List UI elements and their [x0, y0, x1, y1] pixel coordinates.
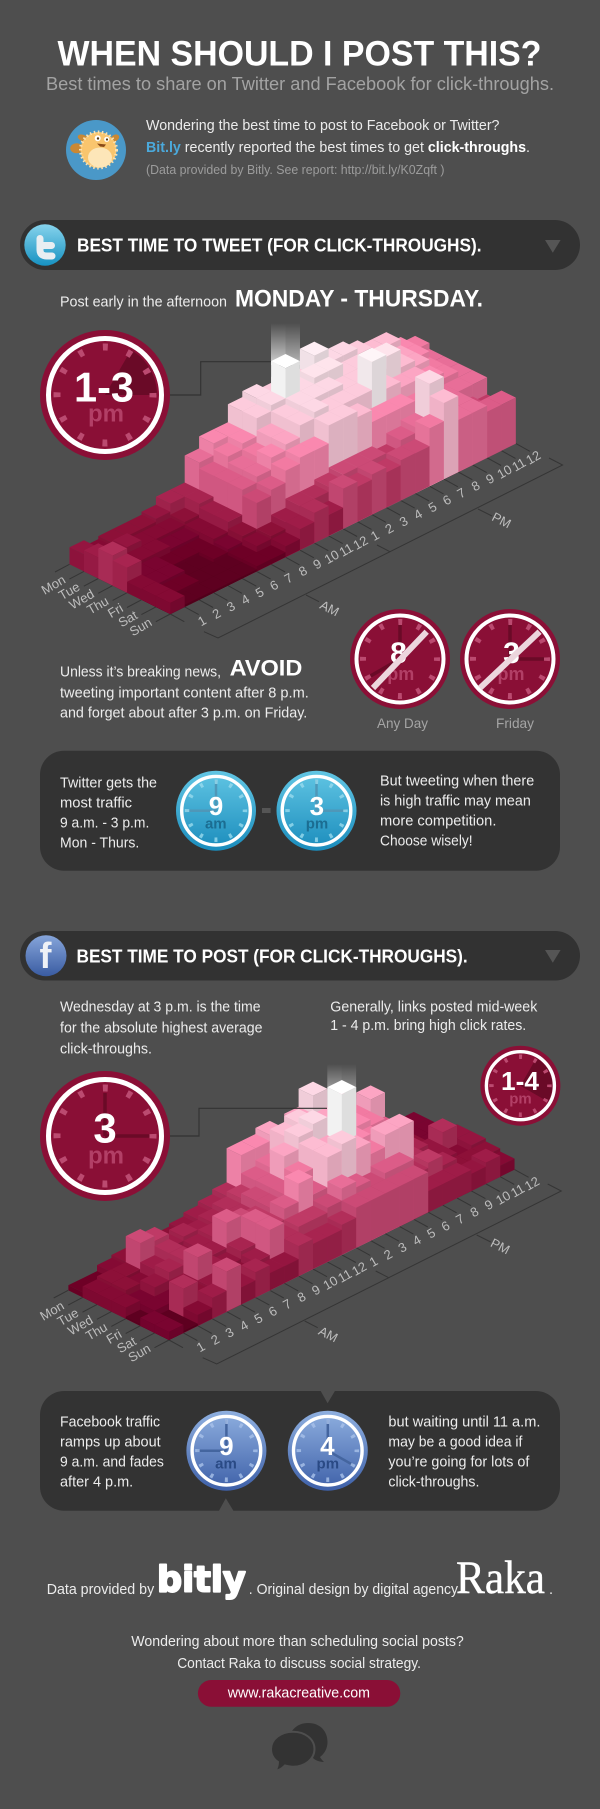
chart: facebook click-throughs 3D bars: PM: [488, 1235, 512, 1257]
avoid text: tweeting important content after 8 p.m.: [60, 685, 309, 701]
clock: 1-3 pm: 1-3: [74, 364, 134, 411]
clock: 4 pm facebook: pm: [317, 1455, 339, 1472]
intro text: Bit.ly recently reported the best times to get click-throughs.: [146, 140, 530, 156]
clock: avoid 8 pm any day: [350, 609, 450, 731]
clock: 1-4 pm small: pm: [509, 1090, 532, 1107]
chart: twitter click-throughs 3D bars: 10: [322, 547, 342, 567]
panel text left: Mon - Thurs.: [60, 835, 139, 851]
banner: best time to tweet: [20, 220, 580, 270]
connector: clock to peak: [170, 362, 271, 395]
clock: 3 pm: pm: [306, 815, 328, 832]
dash between clocks: [262, 808, 271, 813]
credits line: .: [549, 1582, 553, 1598]
chart: facebook click-throughs 3D bars: Fri: [104, 1326, 124, 1347]
intro text: Wondering the best time to post to Facebook or Twitter?: [146, 118, 500, 134]
intro text: [146, 118, 530, 177]
panel text left: ramps up about: [60, 1435, 161, 1451]
panel text left: most traffic: [60, 795, 132, 811]
panel text right: [380, 773, 534, 849]
panel text right: click-throughs.: [388, 1475, 479, 1491]
panel text left: Facebook traffic: [60, 1415, 160, 1431]
chart: twitter click-throughs 3D bars: 3: [224, 598, 238, 615]
chart: twitter click-throughs 3D bars: 6: [267, 577, 281, 594]
banner: best time to tweet: BEST TIME TO TWEET (FOR CLICK-THROUGHS).: [77, 235, 482, 256]
chart: facebook click-throughs 3D bars: 10: [493, 1188, 513, 1208]
banner: best time to post: BEST TIME TO POST (FOR CLICK-THROUGHS).: [76, 945, 468, 966]
chart: twitter click-throughs 3D bars: Fri: [105, 600, 126, 621]
chart: twitter click-throughs 3D bars: Sat: [116, 607, 140, 630]
chart: facebook click-throughs 3D bars: 8: [467, 1204, 481, 1220]
avoid text: and forget about after 3 p.m. on Friday.: [60, 705, 307, 721]
clock: avoid 8 pm any day: pm: [387, 664, 414, 684]
chart: facebook click-throughs 3D bars: 5: [424, 1225, 438, 1242]
clock: 1-3 pm: [40, 330, 170, 460]
chart: facebook click-throughs 3D bars: 12: [349, 1259, 369, 1279]
chart: twitter click-throughs 3D bars: 11: [336, 540, 356, 560]
title: WHEN SHOULD I POST THIS?: [58, 35, 542, 74]
panel text left: after 4 p.m.: [60, 1475, 133, 1491]
credits line: bitly: [157, 1560, 246, 1601]
credits line: Raka: [456, 1552, 545, 1604]
clock: 1-4 pm small: 1-4: [501, 1066, 540, 1096]
button: website: [198, 1680, 400, 1707]
chart: facebook click-throughs 3D bars: 9: [309, 1282, 323, 1298]
chart: twitter click-throughs 3D bars: 8: [469, 478, 483, 494]
panel text left: [60, 1415, 164, 1491]
chart: facebook click-throughs 3D bars: 11: [508, 1181, 527, 1200]
chart: facebook click-throughs 3D bars: 8: [295, 1289, 308, 1305]
chart: facebook click-throughs 3D bars: Thu: [83, 1319, 110, 1343]
chart: twitter click-throughs 3D bars: Sun: [127, 615, 154, 639]
contact text: [131, 1634, 464, 1672]
connector: clock to facebook peak: [170, 1108, 327, 1136]
text: wednesday at 3 pm: [60, 1000, 262, 1057]
clock: avoid 3 pm friday: 3: [503, 637, 520, 670]
chart: facebook click-throughs 3D bars: 12: [522, 1173, 542, 1194]
chart: twitter click-throughs 3D bars: AM: [317, 597, 342, 619]
text: generally mid-week: [330, 1000, 538, 1034]
clock: 4 pm facebook: [288, 1411, 368, 1491]
clock: 3 pm: [276, 771, 356, 851]
heading: monday to thursday: [60, 286, 483, 313]
contact text: Wondering about more than scheduling social posts?: [131, 1634, 464, 1650]
clock: 9 am: am: [205, 815, 227, 832]
panel text right: but waiting until 11 a.m.: [388, 1415, 540, 1431]
button: website: www.rakacreative.com: [227, 1686, 370, 1702]
chart: facebook click-throughs 3D bars: Mon: [37, 1298, 67, 1324]
chart: twitter click-throughs 3D bars: 2: [382, 520, 396, 537]
chart: facebook click-throughs 3D bars: 5: [251, 1310, 265, 1327]
chart: facebook click-throughs 3D bars: 3: [395, 1239, 409, 1256]
clock: avoid 8 pm any day: 8: [390, 637, 407, 670]
clock: 3 pm large: 3: [93, 1105, 117, 1152]
chart: twitter click-throughs 3D bars: 3: [397, 513, 411, 530]
chart: twitter click-throughs 3D bars: PM: [489, 509, 514, 531]
chart: twitter click-throughs 3D bars: 9: [310, 556, 324, 572]
chart: twitter click-throughs 3D bars: 12: [350, 533, 370, 553]
clock: 9 am facebook: 9: [219, 1431, 234, 1461]
chart: twitter click-throughs 3D bars: 5: [426, 499, 439, 516]
chart: twitter click-throughs 3D bars: 1: [195, 612, 209, 629]
panel text right: you’re going for lots of: [388, 1455, 530, 1471]
avoid text: Unless it’s breaking news,: [60, 665, 221, 681]
credits line: [47, 1552, 553, 1604]
chart: twitter click-throughs 3D bars: 7: [282, 570, 295, 587]
text: wednesday at 3 pm: Wednesday at 3 p.m. is the time: [60, 1000, 261, 1016]
clock: 9 am facebook: [186, 1411, 266, 1491]
chart: twitter click-throughs 3D bars: Mon: [39, 572, 68, 598]
chart: facebook click-throughs 3D bars: Tue: [55, 1305, 81, 1329]
chart: facebook click-throughs 3D bars: 7: [453, 1211, 467, 1227]
chart: facebook click-throughs 3D bars: 7: [280, 1296, 294, 1313]
clock: 1-4 pm small: [480, 1046, 560, 1126]
avoid text: [60, 655, 309, 721]
panel text right: may be a good idea if: [388, 1435, 523, 1451]
chart: facebook click-throughs 3D bars: 1: [367, 1253, 380, 1270]
chart: facebook click-throughs 3D bars: [37, 1064, 561, 1457]
chart: facebook click-throughs 3D bars: 2: [381, 1246, 395, 1263]
chart: facebook click-throughs 3D bars: AM: [316, 1323, 340, 1345]
clock: 1-3 pm: pm: [88, 401, 124, 428]
text: generally mid-week: Generally, links posted mid-week: [330, 1000, 538, 1016]
credits line: Data provided by: [47, 1582, 155, 1598]
subtitle: Best times to share on Twitter and Facebook for click-throughs.: [46, 73, 554, 94]
icon: bitly pufferfish: [66, 120, 126, 180]
clock: avoid 8 pm any day: Any Day: [377, 715, 428, 731]
chart: twitter click-throughs 3D bars: 12: [523, 447, 543, 468]
panel text left: Twitter gets the: [60, 775, 157, 791]
chart: facebook click-throughs 3D bars: 4: [410, 1232, 424, 1249]
text: wednesday at 3 pm: for the absolute highest average: [60, 1020, 262, 1036]
text: generally mid-week: 1 - 4 p.m. bring high click rates.: [330, 1018, 526, 1034]
chart: facebook click-throughs 3D bars: 6: [266, 1303, 280, 1320]
chart: twitter click-throughs 3D bars: 11: [509, 455, 528, 474]
heading: monday to thursday: Post early in the afternoon: [60, 295, 227, 311]
banner: best time to post: f: [40, 935, 52, 976]
chart: facebook click-throughs 3D bars: 3: [223, 1324, 236, 1341]
chart: twitter click-throughs 3D bars: [39, 323, 563, 730]
chart: facebook click-throughs 3D bars: Sun: [126, 1341, 153, 1365]
clock: 4 pm facebook: 4: [320, 1431, 335, 1461]
panel text right: [388, 1415, 540, 1491]
clock: 3 pm large: pm: [88, 1142, 124, 1169]
panel: twitter traffic: [40, 751, 560, 871]
chart: twitter click-throughs 3D bars: 6: [440, 492, 454, 508]
clock: avoid 3 pm friday: Friday: [496, 715, 534, 731]
clock: 9 am: [176, 771, 256, 851]
chart: facebook click-throughs 3D bars: 9: [482, 1196, 496, 1213]
panel text right: Choose wisely!: [380, 833, 473, 849]
chart: twitter click-throughs 3D bars: 4: [238, 591, 252, 608]
credits line: . Original design by digital agency: [249, 1582, 459, 1598]
icon: speech bubbles: [271, 1723, 328, 1771]
chart: facebook click-throughs 3D bars: Sat: [114, 1333, 139, 1356]
clock: 3 pm: 3: [310, 791, 324, 821]
chart: facebook click-throughs 3D bars: Wed: [65, 1312, 95, 1338]
chart: twitter click-throughs 3D bars: Tue: [56, 579, 82, 603]
panel: facebook traffic: [40, 1391, 560, 1511]
chart: twitter click-throughs 3D bars: 1: [368, 527, 382, 544]
clock: 3 pm large: [40, 1071, 170, 1201]
panel text left: 9 a.m. - 3 p.m.: [60, 815, 149, 831]
clock: avoid 3 pm friday: pm: [498, 664, 524, 684]
chart: twitter click-throughs 3D bars: Thu: [84, 593, 111, 617]
text: wednesday at 3 pm: click-throughs.: [60, 1041, 152, 1057]
intro text: (Data provided by Bitly. See report: http://bit.ly/K0Zqft ): [146, 163, 444, 177]
clock: avoid 3 pm friday: [460, 609, 560, 731]
chart: twitter click-throughs 3D bars: 8: [296, 563, 310, 579]
panel text right: But tweeting when there: [380, 773, 534, 789]
banner: best time to post: [20, 931, 580, 980]
chart: twitter click-throughs 3D bars: 5: [253, 584, 267, 601]
chart: facebook click-throughs 3D bars: 11: [335, 1266, 354, 1286]
panel text right: is high traffic may mean: [380, 793, 531, 809]
clock: 9 am facebook: am: [215, 1455, 237, 1472]
panel text left: 9 a.m. and fades: [60, 1455, 164, 1471]
chart: facebook click-throughs 3D bars: 1: [194, 1338, 208, 1355]
chart: facebook click-throughs 3D bars: 6: [439, 1218, 452, 1234]
chart: twitter click-throughs 3D bars: 2: [210, 605, 223, 622]
chart: twitter click-throughs 3D bars: 7: [454, 485, 468, 501]
panel text right: more competition.: [380, 813, 496, 829]
chart: facebook click-throughs 3D bars: 2: [208, 1331, 222, 1348]
contact text: Contact Raka to discuss social strategy.: [177, 1656, 421, 1672]
chart: twitter click-throughs 3D bars: Wed: [66, 586, 97, 612]
clock: 9 am: 9: [209, 791, 223, 821]
chart: facebook click-throughs 3D bars: 4: [237, 1317, 251, 1334]
chart: facebook click-throughs 3D bars: 10: [320, 1273, 340, 1293]
chart: twitter click-throughs 3D bars: 4: [411, 506, 425, 523]
chart: twitter click-throughs 3D bars: 9: [483, 470, 497, 487]
heading: monday to thursday: MONDAY - THURSDAY.: [235, 286, 483, 313]
chart: twitter click-throughs 3D bars: 10: [494, 462, 514, 482]
panel text left: [60, 775, 157, 851]
avoid text: AVOID: [230, 655, 302, 680]
